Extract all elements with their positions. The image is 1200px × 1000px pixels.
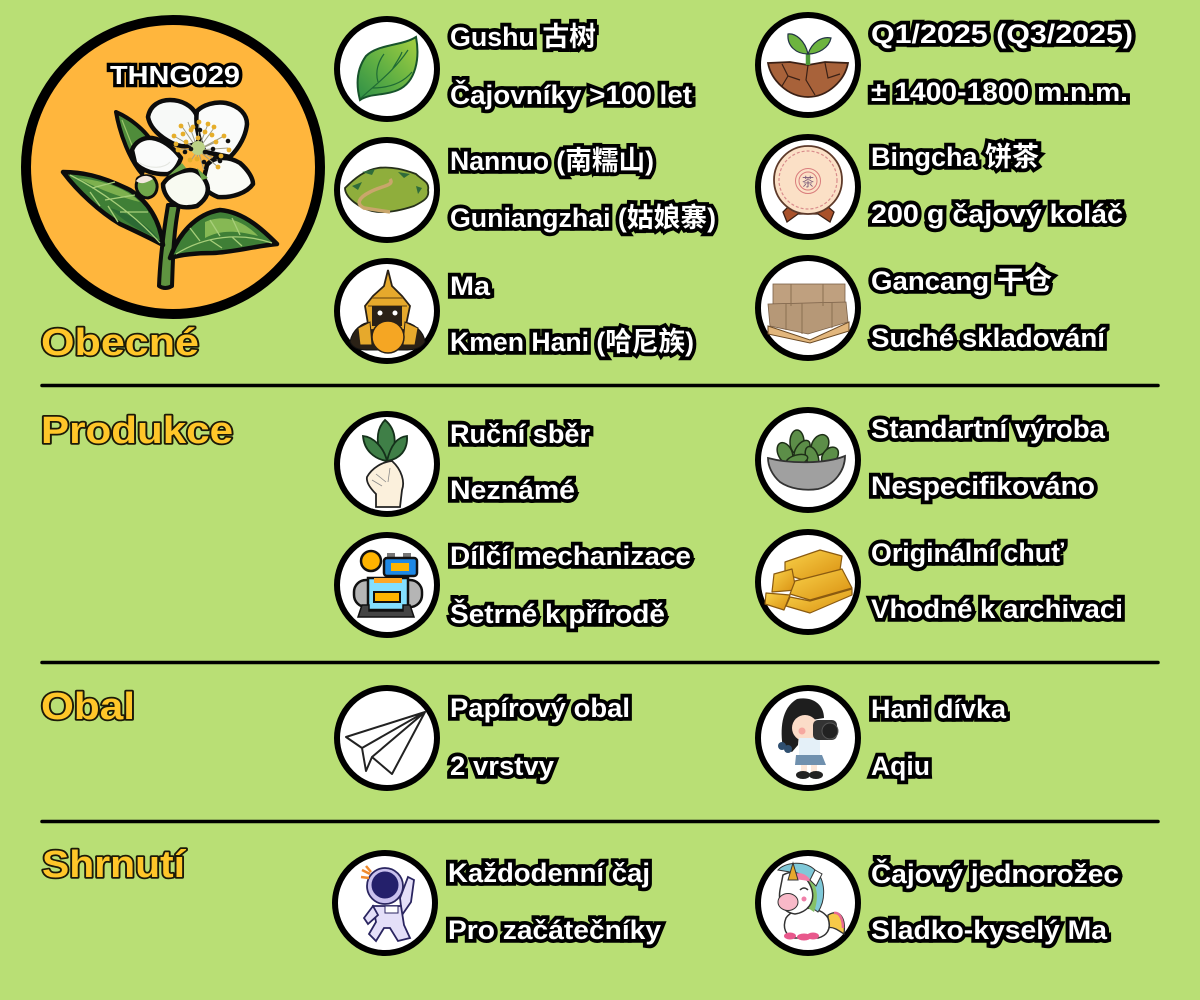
item: harvest date	[758, 15, 1133, 115]
text: hand picking: Ruční sběr	[450, 419, 590, 449]
badge code: THNG029	[110, 60, 240, 90]
text: Gancang: Gancang 干仓	[871, 266, 1052, 296]
text: dry storage: Suché skladování	[871, 323, 1107, 353]
item: Bingcha	[758, 137, 1123, 237]
icon: leaf	[358, 37, 417, 100]
icon: guardian figure	[350, 270, 425, 353]
icon: tea cake on stand	[774, 146, 842, 222]
text: altitude: ± 1400-1800 m.n.m.	[871, 77, 1128, 107]
item: Gushu	[337, 19, 692, 119]
item: standard production	[758, 410, 1106, 510]
panel: main badge with flower	[26, 20, 320, 314]
text: unknown: Neznámé	[450, 475, 575, 505]
text: layers: 2 vrstvy	[450, 751, 554, 781]
item: Gancang	[758, 258, 1107, 358]
text: age: Čajovníky >100 let	[450, 79, 692, 110]
text: tea unicorn: Čajový jednorožec	[871, 858, 1119, 889]
item: hand picking	[337, 414, 590, 514]
text: Bingcha: Bingcha 饼茶	[871, 142, 1039, 172]
text: Nannuo: Nannuo (南糯山)	[450, 146, 654, 176]
text: original taste: Originální chuť	[871, 538, 1064, 568]
icon: seedling in soil	[768, 34, 848, 97]
text: unspecified: Nespecifikováno	[871, 471, 1095, 501]
item: original taste	[758, 532, 1123, 632]
text: Gushu: Gushu 古树	[450, 22, 596, 52]
text: standard production: Standartní výroba	[871, 414, 1106, 444]
item: Ma	[337, 261, 694, 361]
text: sweet-sour Ma: Sladko-kyselý Ma	[871, 915, 1108, 945]
item: everyday tea	[335, 853, 661, 953]
icon: bowl of leaves	[768, 430, 845, 490]
item: paper wrapper	[337, 688, 630, 788]
heading: Shrnutí: Shrnutí	[42, 844, 187, 886]
icon: unicorn	[778, 863, 844, 940]
text: for beginners: Pro začátečníky	[448, 915, 661, 945]
heading: Obal: Obal	[41, 686, 135, 728]
icon: gold bars	[765, 550, 852, 613]
text: eco friendly: Šetrné k přírodě	[450, 598, 665, 629]
item: Hani girl	[758, 688, 1007, 788]
heading: Produkce: Produkce	[41, 410, 233, 452]
icon: hand with leaves	[363, 420, 407, 507]
icon: paper plane	[346, 712, 425, 774]
item: tea unicorn	[758, 853, 1119, 953]
text: weight: 200 g čajový koláč	[871, 199, 1123, 229]
icon: tea cake on stand: 茶	[802, 173, 814, 190]
item: mechanization	[337, 535, 691, 635]
text: Hani girl: Hani dívka	[871, 694, 1007, 724]
icon: pallet of boxes	[768, 284, 849, 343]
icon: girl with camera	[778, 698, 838, 779]
text: date: Q1/2025 (Q3/2025)	[871, 19, 1133, 49]
text: paper wrapper: Papírový obal	[450, 693, 630, 723]
item: Nannuo	[337, 140, 716, 240]
text: suitable for aging: Vhodné k archivaci	[871, 594, 1123, 624]
text: everyday tea: Každodenní čaj	[448, 858, 650, 888]
text: Hani tribe: Kmen Hani (哈尼族)	[450, 327, 694, 357]
icon: tea flower	[63, 100, 277, 288]
text: Guniangzhai: Guniangzhai (姑娘寨)	[450, 203, 716, 233]
icon: mountain map	[345, 167, 428, 212]
heading: Obecné: Obecné	[41, 322, 199, 364]
text: partial mechanization: Dílčí mechanizace	[450, 541, 691, 571]
icon: astronaut	[361, 866, 414, 941]
text: Aqiu: Aqiu	[871, 751, 930, 781]
icon: machine	[354, 551, 422, 617]
text: Ma: Ma	[450, 271, 491, 301]
